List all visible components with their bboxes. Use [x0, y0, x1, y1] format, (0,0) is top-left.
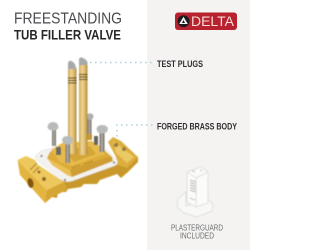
infographic canvas [14, 0, 250, 250]
brass base block [18, 137, 138, 203]
logo: Delta [175, 12, 237, 30]
label: plasterguard included [171, 222, 223, 240]
back bolt [86, 113, 94, 140]
right-front underside face [45, 157, 138, 203]
label: test plugs: TEST PLUGS [157, 59, 203, 69]
test plug tube right [79, 57, 88, 155]
valve illustration [18, 57, 138, 203]
bolt centre [62, 136, 73, 163]
label: plasterguard included: PLASTERGUARD [171, 222, 223, 232]
right block [108, 137, 138, 168]
left block top [18, 156, 64, 190]
label: plasterguard included: INCLUDED [180, 230, 214, 240]
central brass body [47, 141, 113, 177]
panel: right side background [147, 0, 250, 250]
leader line: forged brass body [116, 125, 153, 142]
left end face [18, 160, 47, 203]
bolt left [48, 122, 61, 155]
title: FREESTANDING [14, 10, 122, 28]
gasket screw holes [40, 155, 115, 181]
plasterguard vent [190, 180, 196, 192]
bolt right [94, 125, 108, 152]
left block side face [45, 181, 67, 203]
leader line: test plugs [90, 62, 153, 64]
test plug tube left [68, 61, 76, 154]
title: TUB FILLER VALVE [14, 26, 121, 42]
icon: plasterguard [177, 167, 213, 217]
white gasket [35, 142, 118, 182]
title [14, 10, 122, 42]
logo: Delta: DELTA [191, 14, 234, 29]
